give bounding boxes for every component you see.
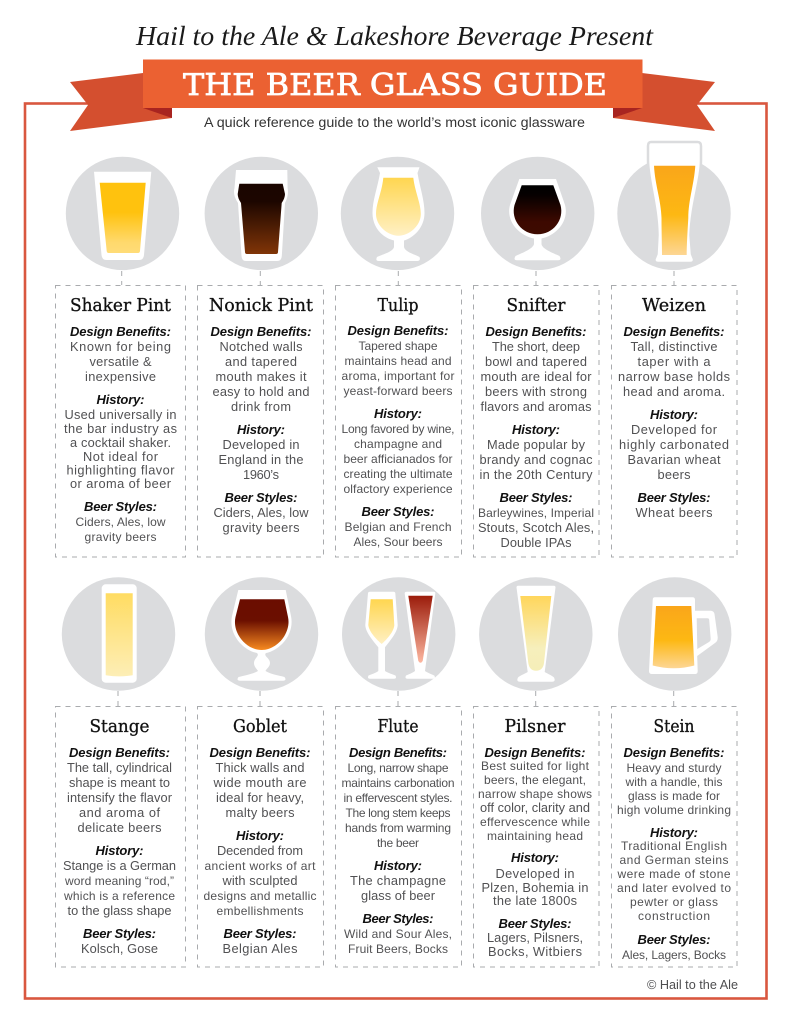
text: Pilsner details: History: [511,850,559,865]
icon: dark flute [405,592,435,679]
icon: flute glasses [342,577,455,691]
text: Stein details: Ales, Lagers, Bocks [622,948,726,962]
text: Stange details: word meaning “rod,” [64,874,174,888]
text: Nonick Pint details: mouth makes it [216,369,307,384]
panel: Stein [612,577,737,967]
text: Pilsner details: Best suited for light [481,759,590,773]
text: Flute details: maintains carbonation [342,776,454,790]
panel: Tulip [336,157,462,557]
text: Shaker Pint details: highlighting flavor [66,462,175,478]
text: Snifter details: brandy and cognac [480,452,593,467]
panel: Stange [56,577,186,967]
text: Stein details: and German steins [620,853,728,867]
text: Pilsner details: narrow shape shows [478,787,592,801]
text: Shaker Pint details: inexpensive [85,369,156,384]
text: Stange details: Kolsch, Gose [81,941,158,956]
text: Pilsner details: maintaining head [487,829,583,843]
text: Shaker Pint details: Beer Styles: [84,499,157,514]
text: Snifter title: Snifter [506,296,566,316]
panel: Nonick Pint [198,157,324,557]
text: Shaker Pint details: gravity beers [84,530,156,544]
text: Nonick Pint title: Nonick Pint [209,296,313,316]
text: Pilsner title: Pilsner [504,717,566,737]
text: Weizen details: Design Benefits: [624,324,724,339]
text: Shaker Pint details: the bar industry as [64,421,177,436]
text: Snifter details: Made popular by [487,437,586,452]
text: Weizen details: narrow base holds [618,369,730,384]
text: Stein details: Beer Styles: [638,932,710,947]
text: Shaker Pint details: History: [96,392,144,407]
text: Stange details: Stange is a German [63,858,176,873]
text: Flute details: Design Benefits: [349,745,447,760]
text: Tulip details: Belgian and French [344,520,452,534]
text: Stein details: high volume drinking [617,803,731,817]
text: Flute details: Wild and Sour Ales, [344,927,452,941]
text: Snifter details: Double IPAs [500,535,572,550]
text: Stange details: shape is meant to [69,775,170,790]
text: Stange details: which is a reference [63,889,175,903]
text: Tulip title: Tulip [378,296,418,316]
text: Snifter details: mouth are ideal for [480,369,592,384]
text: Nonick Pint details: History: [237,422,285,437]
text: Flute details: Long, narrow shape [348,761,449,775]
text: Nonick Pint details: Developed in [222,437,300,452]
icon: stange glass [62,577,175,691]
text: Snifter details: Design Benefits: [486,324,586,339]
text: Stange details: The tall, cylindrical [67,760,172,775]
text: Flute details: the beer [377,836,419,850]
text: Flute details: Fruit Beers, Bocks [348,942,448,956]
text: Goblet details: ideal for heavy, [216,790,304,805]
text: Stein details: pewter or glass [630,895,718,909]
text: Tulip details: History: [374,406,422,421]
text: Tulip details: beer afficianados for [344,452,452,466]
icon: pilsner glass [479,577,592,691]
text: Goblet title: Goblet [233,717,287,737]
text: Snifter details: bowl and tapered [485,354,587,369]
text: Snifter details: Stouts, Scotch Ales, [478,520,594,535]
text: Flute details: The champagne [350,873,446,888]
ribbon left tail [70,73,172,131]
text: Weizen details: taper with a [638,354,711,369]
text: Flute details: glass of beer [361,888,436,903]
icon: weizen glass [617,142,731,270]
text: Shaker Pint details: Not ideal for [83,449,159,464]
panel: Snifter [474,157,599,557]
panel: Weizen [612,142,737,557]
text: Stein title: Stein [654,717,694,737]
icon: shaker pint glass [66,157,179,270]
text: Stein details: Heavy and sturdy [626,761,722,775]
text: Goblet details: wide mouth are [212,775,306,790]
text: Snifter details: Beer Styles: [500,490,572,505]
text: Pilsner details: the late 1800s [493,893,577,908]
text: Shaker Pint details: a cocktail shaker. [70,435,171,450]
ribbon left fold [143,108,172,118]
text: Weizen details [618,324,730,520]
text: Stein details: History: [650,825,698,840]
text: Stange details: Beer Styles: [83,926,156,941]
text: Goblet details [204,745,316,956]
text: Tulip details [342,323,454,549]
text: Flute title: Flute [378,717,418,737]
text: Nonick Pint details [210,324,312,535]
text: Weizen details: Tall, distinctive [630,339,718,354]
text: Stein details [616,745,731,962]
text: Weizen details: Wheat beers [636,505,712,520]
text: Pilsner details: Plzen, Bohemia in [482,880,588,895]
text: Weizen details: beers [658,467,690,482]
text: Shaker Pint details: Design Benefits: [70,324,171,339]
text: Pilsner details: off color, clarity and [480,800,590,815]
text: Nonick Pint details: Notched walls [220,339,302,354]
text: Weizen details: Beer Styles: [638,490,710,505]
text: Stange details: Design Benefits: [69,745,170,760]
panel: Shaker Pint [56,157,186,557]
text: Stein details: were made of stone [616,867,731,881]
text: Pilsner details: Bocks, Witbiers [488,944,582,959]
text: Stange details: delicate beers [78,820,162,835]
text: Nonick Pint details: and tapered [225,354,297,369]
subtitle: A quick reference guide to the world’s most iconic glassware [204,115,585,130]
text: Weizen details: Developed for [631,422,718,437]
text: Stein details: Traditional English [621,839,727,853]
text: Goblet details: Belgian Ales [222,941,298,956]
text: Tulip details: olfactory experience [344,482,453,496]
text: Stange details: History: [96,843,144,858]
panel: Flute [336,577,462,967]
text: Shaker Pint title: Shaker Pint [70,296,171,316]
text: Nonick Pint details: drink from [231,399,291,414]
icon: light flute [365,592,398,679]
footer credit: © Hail to the Ale [647,977,738,992]
text: Tulip details: aroma, important for [342,369,454,383]
panel: Goblet [198,577,324,967]
text: Snifter details: History: [512,422,560,437]
panel: Pilsner [474,577,599,967]
text: Pilsner details [478,745,592,959]
text: Tulip details: yeast-forward beers [344,384,452,398]
text: Snifter details: Barleywines, Imperial [478,506,594,520]
text: Nonick Pint details: Ciders, Ales, low [214,505,309,520]
text: Flute details: hands from warming [345,821,451,835]
text: Stein details: with a handle, this [624,775,722,789]
header title line: Hail to the Ale & Lakeshore Beverage Present [135,20,654,51]
text: Stein details: Design Benefits: [624,745,724,760]
icon: nonick pint glass [205,157,318,270]
text: Pilsner details: Lagers, Pilsners, [487,930,583,945]
text: Goblet details: ancient works of art [204,859,316,873]
text: Goblet details: embellishments [216,904,304,918]
text: Shaker Pint details: versatile & [90,354,152,369]
text: Tulip details: creating the ultimate [344,467,453,481]
text: Nonick Pint details: England in the [218,452,304,467]
text: Weizen details: Bavarian wheat [628,452,721,467]
ribbon main band [143,60,642,108]
text: Tulip details: Design Benefits: [348,323,448,338]
text: Tulip details: Tapered shape [358,339,438,353]
text: Stein details: construction [638,909,710,923]
icon: snifter glass [481,157,594,270]
text: Shaker Pint details: or aroma of beer [70,476,172,491]
text: Flute details: The long stem keeps [346,806,450,820]
text: Goblet details: Beer Styles: [224,926,296,941]
text: Stange details: to the glass shape [68,903,172,918]
text: Stange details: intensify the flavor [67,790,173,805]
text: Snifter details: beers with strong [485,384,587,399]
text: Weizen details: highly carbonated [619,437,729,452]
text: Shaker Pint details: Ciders, Ales, low [76,515,166,529]
text: Goblet details: malty beers [226,805,294,820]
text: Snifter details: flavors and aromas [480,399,592,414]
text: Stein details: glass is made for [628,789,720,803]
text: Tulip details: Ales, Sour beers [354,535,442,549]
text: Nonick Pint details: easy to hold and [212,384,310,399]
text: Goblet details: Decended from [217,843,303,858]
text: Goblet details: Thick walls and [216,760,304,775]
text: Nonick Pint details: gravity beers [222,520,300,535]
text: Pilsner details: beers, the elegant, [484,773,586,787]
ribbon right tail [613,73,715,131]
text: Snifter details: in the 20th Century [480,467,593,482]
text: Goblet details: with sculpted [222,873,298,888]
text: Snifter details: The short, deep [492,339,580,354]
text: Goblet details: History: [236,828,284,843]
text: Flute details: History: [374,858,422,873]
icon: tulip glass [341,157,454,270]
ribbon banner [70,60,715,131]
text: Pilsner details: Developed in [496,866,574,881]
text: Nonick Pint details: Beer Styles: [224,490,298,505]
text: Flute details [342,745,454,956]
ribbon right fold [613,108,642,118]
text: Weizen details: History: [650,407,698,422]
text: Flute details: in effervescent styles. [344,791,452,805]
text: Shaker Pint details: Used universally in [64,407,176,422]
text: Goblet details: designs and metallic [204,889,316,903]
text: Weizen details: head and aroma. [623,384,725,399]
main heading: THE BEER GLASS GUIDE [183,68,607,103]
text: Shaker Pint details [64,324,177,544]
text: Stange title: Stange [90,717,150,737]
text: Tulip details: Beer Styles: [362,504,434,519]
text: Stange details: and aroma of [79,805,160,820]
text: Weizen title: Weizen [642,296,706,316]
text: Flute details: Beer Styles: [362,911,434,926]
text: Goblet details: Design Benefits: [210,745,310,760]
icon: stein mug [618,577,731,691]
text: Shaker Pint details: Known for being [70,339,171,354]
text: Pilsner details: effervescence while [480,815,590,829]
text: Tulip details: champagne and [354,437,442,451]
text: Pilsner details: Beer Styles: [498,916,572,931]
text: Nonick Pint details: 1960’s [243,467,279,482]
icon: goblet glass [205,577,318,691]
text: Stein details: and later evolved to [617,881,731,895]
text: Pilsner details: Design Benefits: [484,745,586,760]
text: Stange details [63,745,176,956]
text: Nonick Pint details: Design Benefits: [210,324,312,339]
text: Tulip details: Long favored by wine, [342,422,454,436]
text: Tulip details: maintains head and [344,354,452,368]
text: Snifter details [478,324,594,550]
